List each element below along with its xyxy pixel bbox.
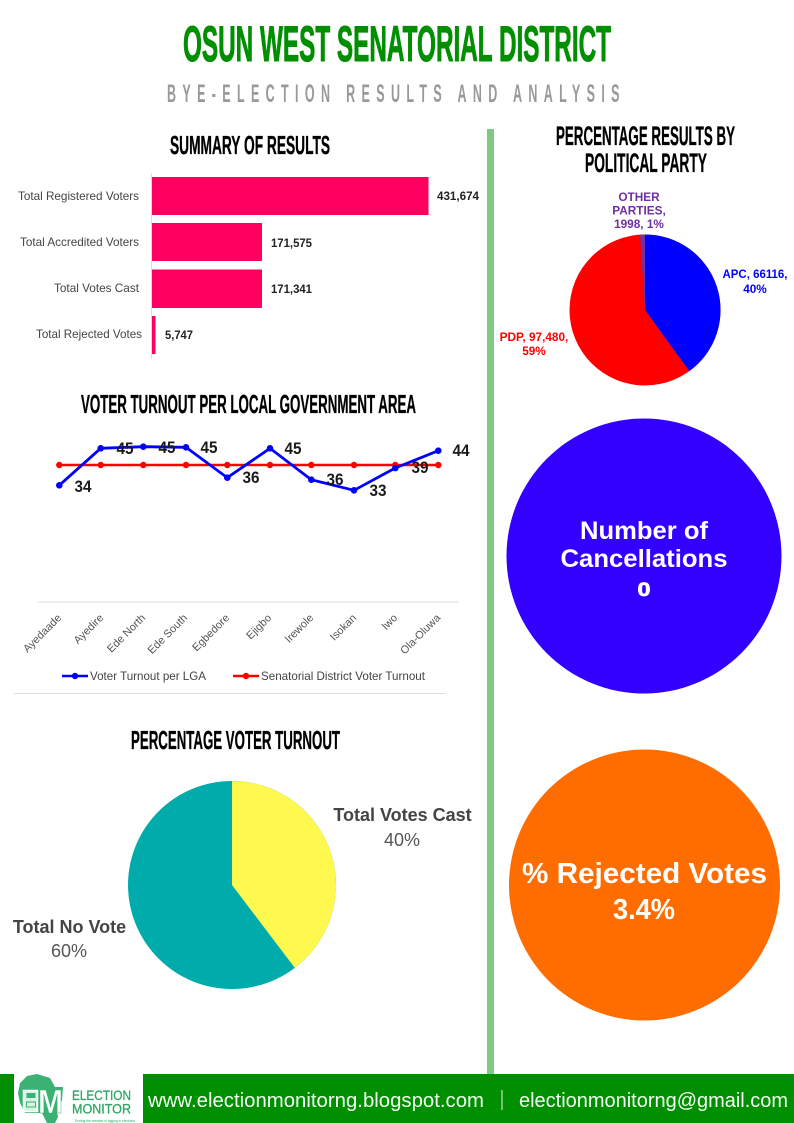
pie chart: party results: PARTIES, <box>612 204 666 218</box>
line chart: voter turnout: Iwo <box>380 612 400 633</box>
line chart: voter turnout <box>21 439 470 657</box>
bar chart: summary: 171,341 <box>271 282 312 296</box>
bar chart: summary: Total Votes Cast <box>54 281 140 295</box>
panel: percentage results by political party <box>500 121 788 386</box>
bar chart: summary: Total Rejected Votes <box>36 327 142 341</box>
line chart: voter turnout: Isokan <box>328 612 359 643</box>
panel: summary of results <box>18 130 479 359</box>
heading: percentage voter turnout: PERCENTAGE VOTER TURNOUT <box>131 725 340 755</box>
footer contact text: electionmonitorng@gmail.com <box>519 1090 788 1112</box>
line chart: voter turnout: 45 <box>200 439 218 457</box>
pie chart: party results: 40% <box>743 282 767 296</box>
pie chart: party results: OTHER <box>618 190 660 204</box>
logo: election monitor: ELECTION <box>72 1088 131 1103</box>
legend: Voter Turnout per LGA <box>90 669 206 683</box>
pie chart: party results: 1998, 1% <box>614 217 664 231</box>
heading: voter turnout: VOTER TURNOUT PER LOCAL GOVERNMENT AREA <box>81 389 416 419</box>
pie chart: voter turnout: Total Votes Cast <box>333 805 472 825</box>
line chart: voter turnout: 39 <box>412 459 428 477</box>
logo: election monitor: M <box>38 1083 63 1120</box>
footer contact text <box>147 1090 788 1112</box>
pie chart: voter turnout <box>13 781 472 989</box>
line chart: voter turnout: Egbedore <box>190 612 232 654</box>
column divider <box>487 129 494 1074</box>
bar chart: summary: Total Registered Voters <box>18 189 139 203</box>
panel: percentage voter turnout <box>13 725 472 989</box>
logo: election monitor <box>18 1074 135 1123</box>
callout: percent rejected votes: % Rejected Votes <box>522 858 767 890</box>
line chart: voter turnout: 34 <box>74 478 92 496</box>
pie chart: voter turnout: 40% <box>384 830 420 850</box>
pie chart: party results <box>500 190 788 386</box>
bar chart: summary: 5,747 <box>165 328 193 342</box>
callout: number of cancellations: Number of <box>580 517 709 545</box>
line chart: voter turnout: 33 <box>370 482 386 500</box>
line chart: voter turnout: 36 <box>326 471 344 489</box>
pie chart: party results: 59% <box>522 344 546 358</box>
pie chart: party results: APC, 66116, <box>722 267 788 281</box>
footer <box>0 1074 794 1123</box>
line chart: voter turnout: 45 <box>116 440 134 458</box>
footer contact text: www.electionmonitorng.blogspot.com <box>147 1090 484 1112</box>
bar chart: summary: 171,575 <box>271 236 312 250</box>
panel: voter turnout per LGA <box>14 389 470 694</box>
pie chart: party results: PDP, 97,480, <box>500 330 568 344</box>
heading: summary of results: SUMMARY OF RESULTS <box>170 130 330 160</box>
heading: percentage results by political party <box>556 121 735 178</box>
callout: number of cancellations <box>506 418 782 694</box>
line chart: voter turnout: Ede North <box>105 612 148 655</box>
logo: election monitor: MONITOR <box>72 1102 131 1116</box>
legend <box>62 669 426 683</box>
callout: number of cancellations: Cancellations <box>560 545 728 573</box>
line chart: voter turnout: 44 <box>452 442 470 460</box>
callout: percent rejected votes: 3.4% <box>613 894 675 926</box>
bar chart: summary: 431,674 <box>437 189 479 203</box>
line chart: voter turnout: 45 <box>284 440 302 458</box>
bar chart: summary: Total Accredited Voters <box>20 235 139 249</box>
line chart: voter turnout: 36 <box>242 469 260 487</box>
line chart: voter turnout: Ayedire <box>72 612 106 647</box>
bar chart: summary <box>18 173 479 359</box>
line chart: voter turnout: Ayedaade <box>21 612 64 655</box>
callout: number of cancellations: 0 <box>638 580 650 601</box>
subtitle: BYE-ELECTION RESULTS AND ANALYSIS <box>167 80 619 108</box>
line chart: voter turnout: Irewole <box>283 612 316 645</box>
logo: election monitor: Ending the menace of rigging in elections <box>75 1119 135 1123</box>
pie chart: voter turnout: Total No Vote <box>13 917 126 937</box>
line chart: voter turnout: Ede South <box>146 612 190 657</box>
legend: Senatorial District Voter Turnout <box>261 669 426 683</box>
pie chart: voter turnout: 60% <box>51 941 87 961</box>
line chart: voter turnout: Ola-Oluwa <box>398 611 444 657</box>
line chart: voter turnout: 45 <box>158 439 176 457</box>
callout: percent rejected votes <box>509 750 780 1020</box>
line chart: voter turnout: Ejigbo <box>244 612 274 642</box>
